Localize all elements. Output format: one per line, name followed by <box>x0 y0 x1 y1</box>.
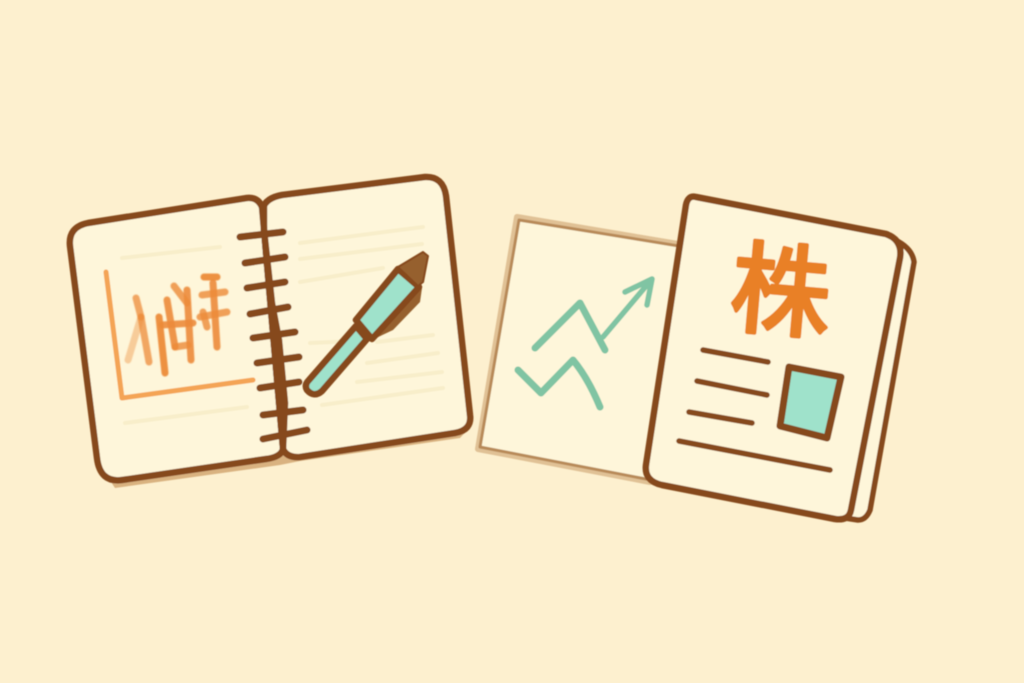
icon: stock report booklet <box>646 197 914 520</box>
notebook page lines <box>122 227 443 423</box>
spiral binding <box>240 232 307 439</box>
icon: open spiral notebook <box>70 177 472 488</box>
chart bars <box>128 277 227 373</box>
right page <box>263 177 470 457</box>
icon: chart sheet <box>478 217 690 482</box>
left page <box>70 198 283 480</box>
report picture <box>780 367 841 438</box>
report text lines <box>679 350 830 470</box>
spine <box>264 205 285 450</box>
chart axes <box>106 272 253 398</box>
rising arrow lines <box>518 279 652 407</box>
icon: pen <box>306 252 428 394</box>
kanji title: 株 <box>726 233 835 353</box>
